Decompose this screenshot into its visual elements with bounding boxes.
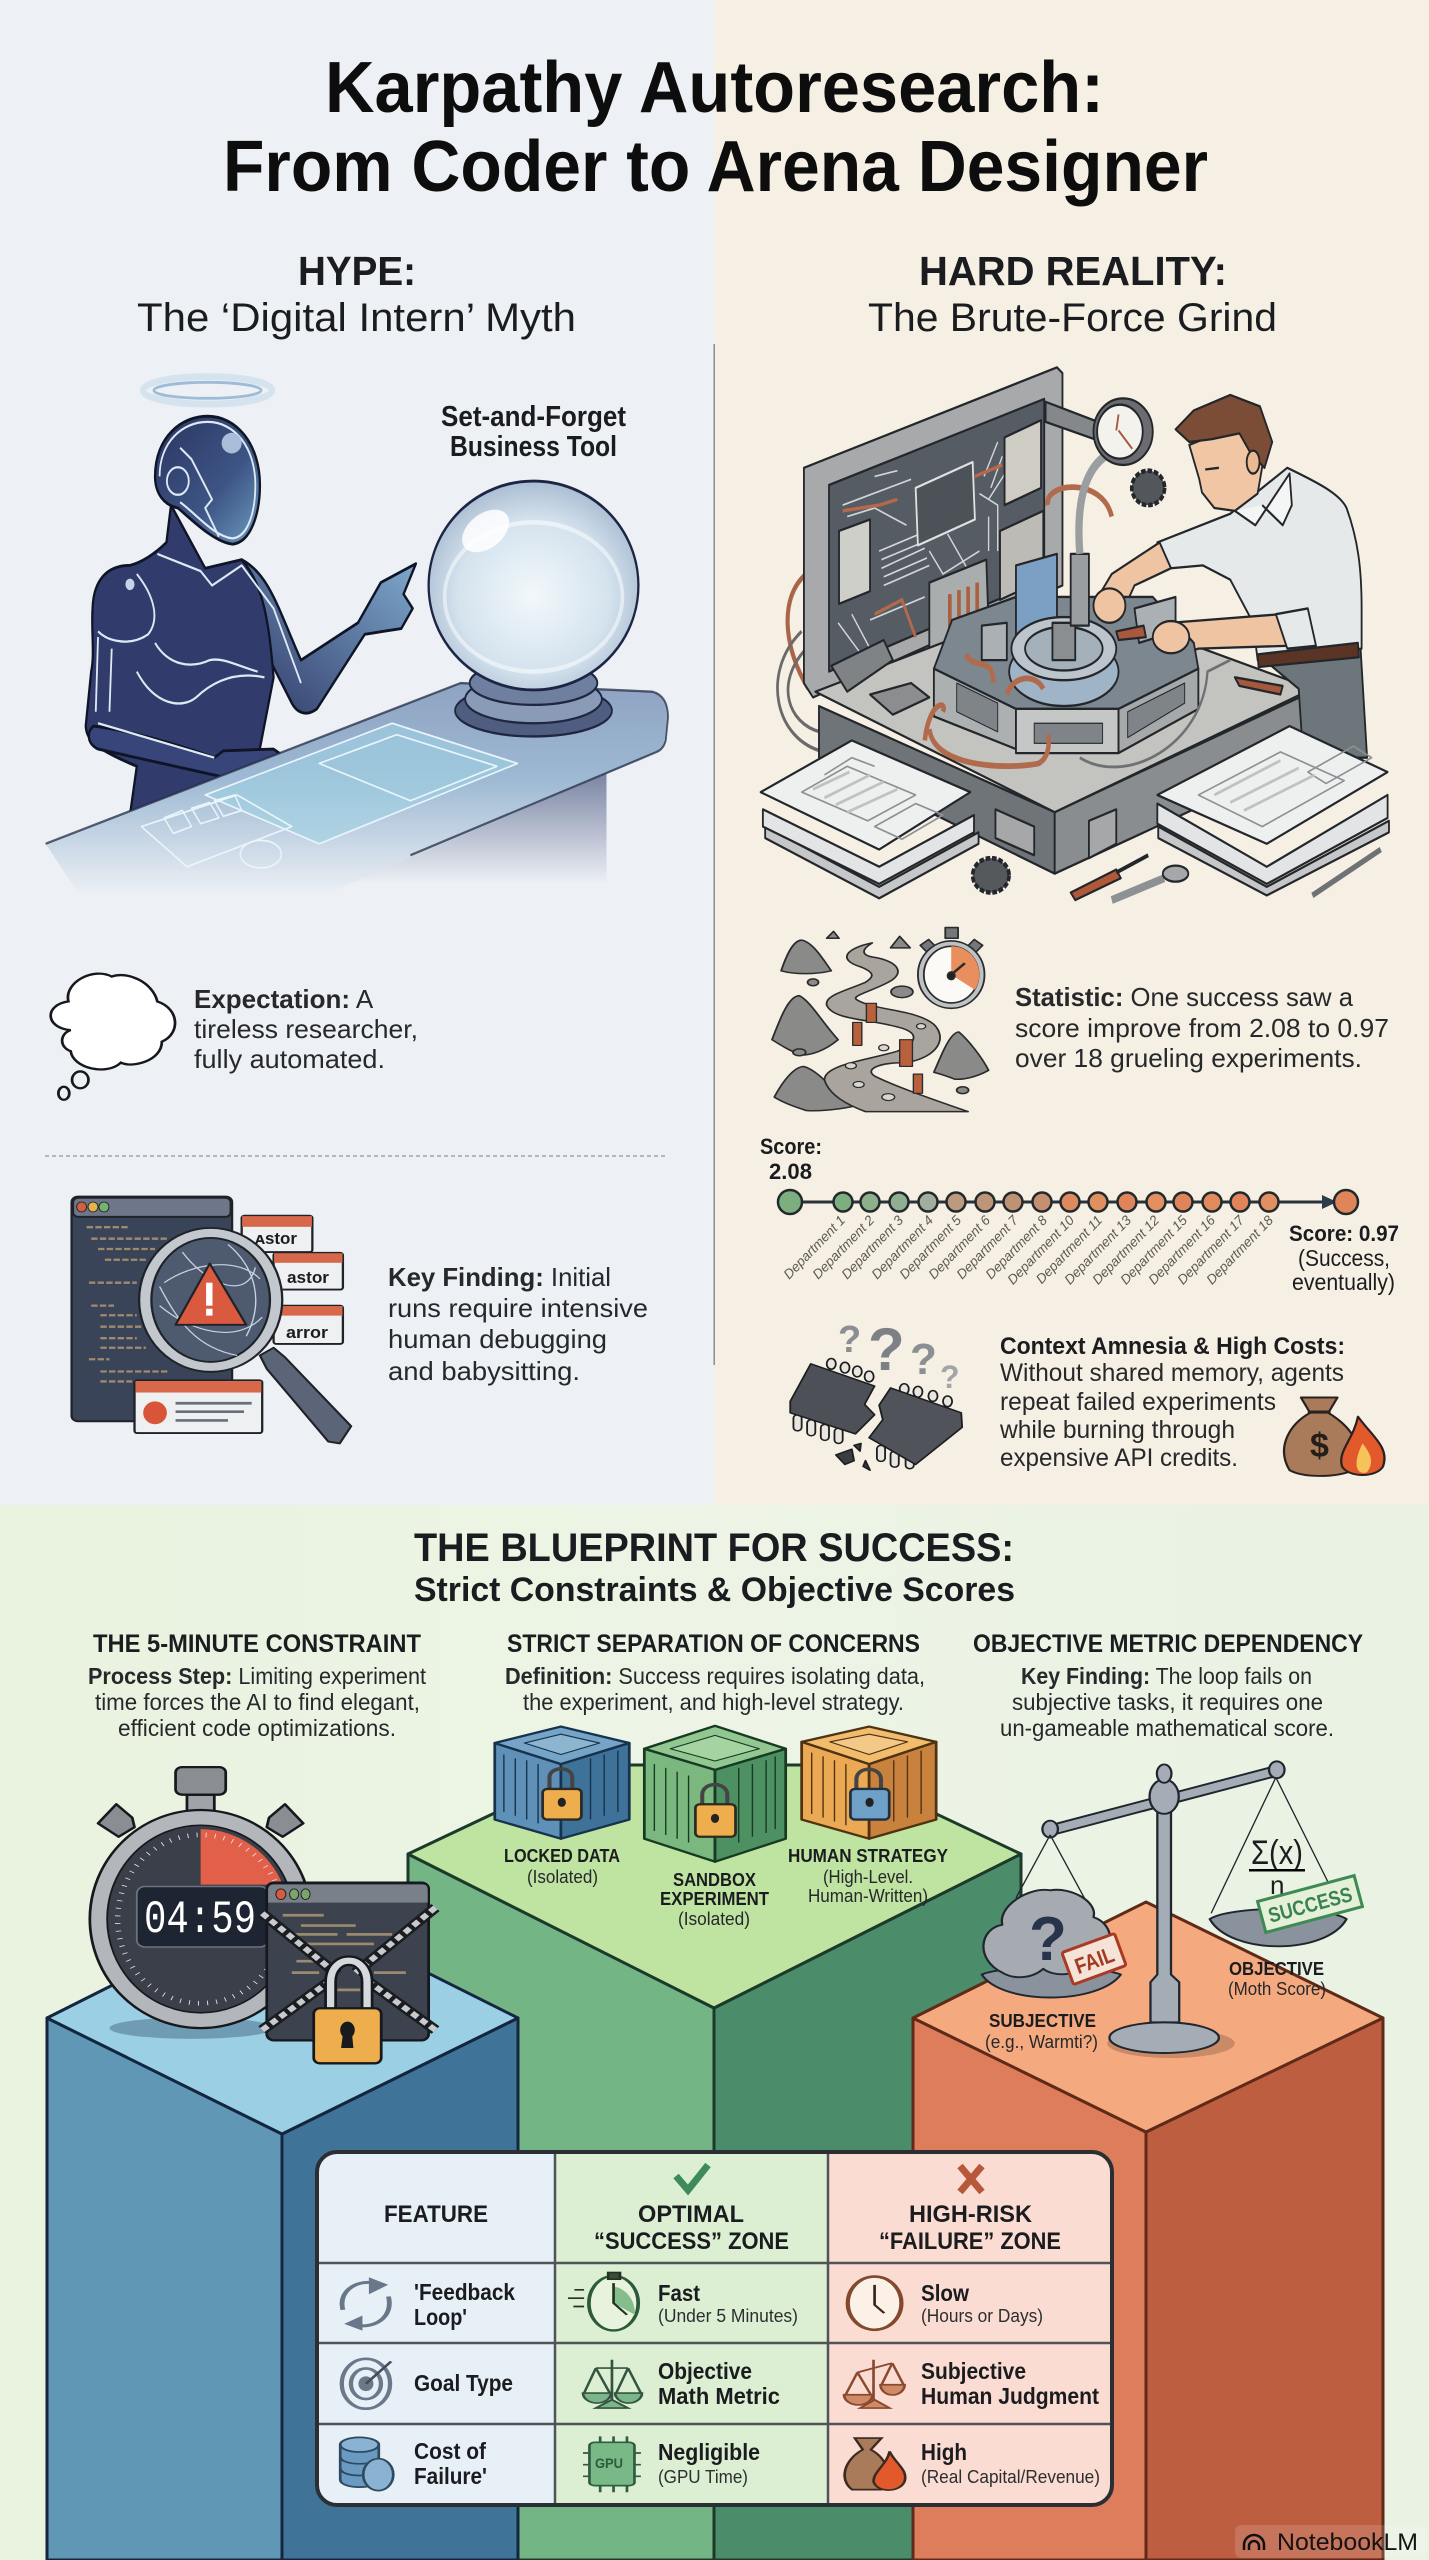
- stamp: fail: [1062, 1933, 1126, 1985]
- label: subjective: SUBJECTIVE: [989, 2011, 1096, 2031]
- column: objective metric: Key Finding: The loop fails on: [1021, 1663, 1312, 1689]
- experiment labels: Department 4: [869, 1213, 936, 1282]
- header: feature: FEATURE: [384, 2201, 488, 2228]
- icon: question marks: ?: [868, 1316, 905, 1383]
- right pan: [1210, 1909, 1347, 1946]
- error cards: [242, 1216, 343, 1344]
- rolled sleeve: [1276, 608, 1316, 649]
- icon: gpu chip: [583, 2436, 641, 2492]
- helmet gloss: [125, 433, 242, 590]
- desk top: [46, 683, 668, 913]
- icon: green scale: [583, 2360, 642, 2408]
- gpu label: GPU: [595, 2455, 623, 2471]
- column: objective metric: OBJECTIVE METRIC DEPENDENCY: [973, 1630, 1363, 1658]
- experiment labels: Department 16: [1145, 1212, 1218, 1287]
- column: separation of concerns: [505, 1630, 925, 1715]
- robot body: [86, 416, 310, 815]
- chip pins: [793, 1358, 952, 1469]
- title: Karpathy Autoresearch:: [325, 48, 1104, 128]
- error labels: arror: [286, 1323, 328, 1342]
- label: sandbox experiment: EXPERIMENT: [660, 1889, 769, 1909]
- stopwatch: [918, 928, 984, 1008]
- row 3 failure: (Real Capital/Revenue): [921, 2467, 1100, 2487]
- text: statistic: [1015, 982, 1389, 1073]
- illustration: engineer at circuit machine: [761, 367, 1389, 900]
- text: context amnesia: while burning through: [999, 1416, 1235, 1444]
- icon: database with dollar coin: [340, 2437, 393, 2491]
- row 2 feature: Goal Type: [414, 2370, 513, 2396]
- column: objective metric: [973, 1630, 1363, 1741]
- strings: [1016, 1777, 1328, 1913]
- text: statistic: over 18 grueling experiments.: [1015, 1043, 1362, 1073]
- desk front: [292, 763, 606, 913]
- pivots: [1042, 1761, 1285, 1838]
- label: subjective: [985, 2011, 1098, 2052]
- row 2 success: [658, 2358, 780, 2409]
- robot highlights: [96, 422, 301, 758]
- digital time readout: 04:59: [144, 1894, 256, 1946]
- ticks: [118, 1835, 284, 2003]
- icon: slow clock: [848, 2277, 901, 2330]
- row 2 failure: [921, 2358, 1099, 2409]
- text: context amnesia: [999, 1333, 1345, 1472]
- experiment labels: [781, 1212, 1276, 1287]
- end score: eventually): [1292, 1269, 1395, 1295]
- label: sandbox experiment: [660, 1870, 769, 1929]
- grey cloud: [983, 1890, 1110, 1977]
- start score: [760, 1134, 822, 1184]
- icon: burning money bag: [1284, 1398, 1385, 1476]
- error labels: ᴀstor: [255, 1229, 297, 1248]
- icon: halo: [143, 377, 272, 404]
- experiment labels: Department 8: [983, 1212, 1050, 1282]
- row 3 success: [658, 2439, 760, 2487]
- hands: [1093, 588, 1189, 653]
- table cell backgrounds: [317, 2152, 1112, 2505]
- row 3 success: (GPU Time): [658, 2467, 748, 2487]
- column: separation of concerns: the experiment, and high-level strategy.: [523, 1689, 904, 1715]
- table grid: [317, 2152, 1112, 2505]
- experiment labels: Department 3: [839, 1212, 906, 1282]
- icon: feedback loop: [342, 2278, 389, 2330]
- arrow: [1322, 1195, 1337, 1209]
- icon: crate sandbox: [644, 1726, 786, 1862]
- row 1 success: (Under 5 Minutes): [658, 2306, 798, 2326]
- row 3 failure: [921, 2439, 1100, 2487]
- magnifier lens: [139, 1228, 282, 1372]
- text: key finding hype: [388, 1262, 648, 1386]
- base shadow and base: [1107, 2029, 1235, 2058]
- illustration: robot and crystal ball: [46, 377, 668, 913]
- crystal ball: [429, 481, 638, 690]
- trousers: [1258, 643, 1367, 758]
- label: set-and-forget: Business Tool: [450, 431, 617, 463]
- pedestal: green: [408, 1765, 1021, 2560]
- label: human strategy: HUMAN STRATEGY: [788, 1846, 948, 1866]
- text: key finding hype: Key Finding: Initial: [388, 1262, 611, 1292]
- label: human strategy: Human-Written): [808, 1886, 928, 1906]
- robot right arm: [242, 560, 416, 713]
- header: success zone: “SUCCESS” ZONE: [594, 2228, 789, 2255]
- label: set-and-forget: Set-and-Forget: [441, 401, 626, 433]
- label: set-and-forget: [441, 401, 626, 463]
- column: 5-minute constraint: Process Step: Limiting experiment: [88, 1663, 427, 1689]
- pedestal: blue: [47, 1900, 518, 2560]
- icon: crate locked data: [495, 1727, 629, 1839]
- icon: stopwatch and locked code window: [90, 1767, 435, 2063]
- tools on floor: [973, 850, 1381, 900]
- end score: (Success,: [1298, 1245, 1390, 1271]
- stopwatch case: [90, 1810, 311, 2028]
- heading: hard reality: The Brute-Force Grind: [868, 296, 1277, 340]
- barriers: [853, 1003, 922, 1093]
- experiment labels: Department 18: [1203, 1212, 1276, 1287]
- row 1 success: [658, 2280, 798, 2326]
- icon: balance scale: [982, 1761, 1347, 2058]
- holographic screen on desk: [141, 723, 518, 868]
- start score: Score:: [760, 1134, 822, 1159]
- icon: money bag fire: [845, 2438, 905, 2490]
- watermark: NotebookLM: [1235, 2525, 1427, 2558]
- icon: broken chip: [790, 1358, 962, 1470]
- dollar sign: $: [1310, 1427, 1329, 1465]
- row 3 feature: Failure': [414, 2463, 487, 2489]
- panel: blueprint background: [0, 1505, 1429, 2560]
- hexagonal core: [934, 554, 1198, 753]
- grey pipes on platform: [1080, 660, 1230, 767]
- formula: n: [1270, 1870, 1284, 1900]
- padlock: [314, 1961, 381, 2063]
- text: context amnesia: Context Amnesia & High Costs:: [1000, 1333, 1345, 1360]
- timeline chart: 18 experiments: [760, 1134, 1399, 1295]
- pipes: [925, 487, 1112, 766]
- text: context amnesia: expensive API credits.: [1000, 1444, 1238, 1472]
- column: objective metric: un-gameable mathematical score.: [1000, 1715, 1334, 1741]
- icon: check mark: [676, 2165, 708, 2190]
- row 2 failure: Human Judgment: [921, 2383, 1099, 2409]
- experiment labels: Department 1: [781, 1213, 848, 1282]
- stamp: fail: FAIL: [1071, 1942, 1118, 1979]
- pedestal: orange: [913, 1902, 1383, 2560]
- icon: tilted scale: [844, 2360, 905, 2408]
- text: statistic: score improve from 2.08 to 0.97: [1015, 1013, 1389, 1043]
- column: objective metric: subjective tasks, it requires one: [1012, 1689, 1323, 1715]
- shirt: [1157, 468, 1362, 660]
- label: objective: [1228, 1959, 1326, 1999]
- magnifier handle: [260, 1348, 351, 1443]
- beam: [1050, 1766, 1278, 1835]
- comparison table: [317, 2152, 1112, 2505]
- column: 5-minute constraint: time forces the AI to find elegant,: [95, 1689, 420, 1715]
- monitor: [804, 367, 1062, 697]
- icon: target: [342, 2359, 391, 2409]
- icon: fast stopwatch: [568, 2273, 638, 2330]
- column: 5-minute constraint: [88, 1630, 427, 1741]
- stopwatch face: [107, 1825, 294, 2013]
- label: objective: (Moth Score): [1228, 1979, 1326, 1999]
- heading: hype: [137, 248, 576, 340]
- lower arm: [1155, 614, 1290, 657]
- title: [223, 48, 1208, 207]
- head: [1176, 395, 1272, 511]
- label: subjective: (e.g., Warmti?): [985, 2032, 1098, 2052]
- experiment labels: Department 7: [954, 1212, 1021, 1282]
- label: human strategy: [788, 1846, 948, 1906]
- column: separation of concerns: Definition: Success requires isolating data,: [505, 1663, 925, 1689]
- icon: question marks: ?: [910, 1335, 937, 1384]
- pole: [1150, 1802, 1179, 2022]
- error labels: [255, 1229, 329, 1342]
- label: sandbox experiment: (Isolated): [678, 1909, 750, 1929]
- foot: [1109, 2022, 1219, 2053]
- chains: [262, 1908, 435, 2030]
- text: expectation: [194, 984, 418, 1074]
- icon: question marks: [838, 1316, 960, 1395]
- experiment labels: Department 5: [897, 1212, 964, 1282]
- row 1 failure: Slow: [921, 2280, 969, 2306]
- icon: debugging window with magnifier: [72, 1197, 351, 1443]
- cables: [788, 574, 808, 689]
- alert card: [135, 1380, 262, 1433]
- right chip half: [869, 1388, 962, 1464]
- left chip half: [790, 1364, 875, 1434]
- row 3 failure: High: [921, 2439, 967, 2465]
- icon: crate human strategy: [802, 1727, 936, 1839]
- formula: Σ(x): [1251, 1834, 1303, 1872]
- label: objective: OBJECTIVE: [1229, 1959, 1324, 1979]
- icon: question marks: ?: [940, 1359, 960, 1395]
- heading: hard reality: [868, 248, 1277, 340]
- experiment labels: Department 13: [1061, 1212, 1134, 1287]
- start score: 2.08: [769, 1159, 812, 1184]
- belt: [1258, 643, 1359, 667]
- tools on platform: [831, 640, 1283, 715]
- experiment labels: Department 12: [1089, 1212, 1162, 1287]
- row 1 failure: (Hours or Days): [921, 2306, 1043, 2326]
- text: key finding hype: and babysitting.: [388, 1356, 580, 1386]
- text: expectation: tireless researcher,: [194, 1014, 418, 1044]
- title: From Coder to Arena Designer: [223, 127, 1208, 207]
- panel: hard reality background: [714, 0, 1429, 1505]
- end score: Score: 0.97: [1289, 1221, 1399, 1246]
- column: separation of concerns: STRICT SEPARATION OF CONCERNS: [507, 1630, 920, 1658]
- heading: blueprint: [414, 1526, 1015, 1609]
- experiment labels: Department 2: [810, 1212, 877, 1282]
- panel: hype background: [0, 0, 714, 1505]
- left pan: [982, 1967, 1121, 1998]
- icon: cross mark: [960, 2166, 982, 2192]
- header: success zone: OPTIMAL: [638, 2201, 744, 2228]
- row 3 feature: Cost of: [414, 2438, 486, 2464]
- header: failure zone: “FAILURE” ZONE: [879, 2228, 1061, 2255]
- text: expectation: fully automated.: [194, 1044, 385, 1074]
- road pebbles: [845, 1024, 926, 1101]
- text: statistic: Statistic: One success saw a: [1015, 982, 1354, 1012]
- icon: question marks: ?: [838, 1319, 861, 1361]
- text: key finding hype: human debugging: [388, 1324, 607, 1354]
- row 2 failure: Subjective: [921, 2358, 1026, 2384]
- column: 5-minute constraint: THE 5-MINUTE CONSTRAINT: [93, 1630, 421, 1658]
- right paper stack: [1157, 726, 1389, 895]
- machine base: [815, 597, 1312, 874]
- row 1 success: Fast: [658, 2280, 700, 2306]
- column: 5-minute constraint: efficient code optimizations.: [118, 1715, 396, 1741]
- row 1 feature: 'Feedback: [414, 2279, 515, 2305]
- header: success zone: [594, 2201, 789, 2255]
- text: context amnesia: repeat failed experiments: [1000, 1388, 1276, 1416]
- cloud question mark: ?: [1029, 1905, 1067, 1974]
- row 3 feature: [414, 2438, 487, 2489]
- left paper stack: [761, 740, 979, 898]
- experiment labels: Department 15: [1117, 1212, 1190, 1287]
- road: [824, 943, 968, 1112]
- row 2 success: Math Metric: [658, 2383, 780, 2409]
- text: context amnesia: Without shared memory, agents: [1000, 1359, 1344, 1387]
- icon: winding road with stopwatch: [772, 928, 989, 1112]
- orb base: [455, 661, 612, 736]
- rocks: [772, 931, 989, 1111]
- gauge: [1046, 398, 1153, 554]
- desk edge: [46, 683, 668, 855]
- watermark: NotebookLM: NotebookLM: [1277, 2529, 1418, 2556]
- row 1 feature: [414, 2279, 515, 2330]
- shadow: [109, 2017, 274, 2039]
- gear: [1132, 471, 1165, 505]
- row 1 feature: Loop': [414, 2304, 467, 2330]
- code window: [267, 1883, 429, 2040]
- label: sandbox experiment: SANDBOX: [673, 1870, 756, 1890]
- label: locked data: LOCKED DATA: [504, 1846, 620, 1866]
- chip debris: [836, 1443, 870, 1470]
- formula: [1249, 1834, 1305, 1900]
- forearm: [1098, 542, 1171, 626]
- icon: thought cloud: [51, 974, 175, 1100]
- experiment labels: Department 10: [1004, 1212, 1077, 1287]
- row 3 success: Negligible: [658, 2439, 760, 2465]
- end score: [1289, 1221, 1399, 1295]
- collar: [1235, 474, 1292, 525]
- label: locked data: [504, 1846, 620, 1887]
- heading: blueprint: Strict Constraints & Objective Scores: [414, 1571, 1015, 1609]
- heading: hard reality: HARD REALITY:: [919, 248, 1227, 294]
- cables grey: [777, 631, 824, 752]
- digital display: [137, 1887, 268, 1947]
- code window: [72, 1197, 232, 1421]
- experiment labels: Department 11: [1033, 1213, 1105, 1287]
- text: key finding hype: runs require intensive: [388, 1293, 648, 1323]
- heading: hype: The ‘Digital Intern’ Myth: [137, 296, 576, 340]
- red wedge: [201, 1829, 283, 1885]
- heading: hype: HYPE:: [298, 248, 416, 294]
- label: locked data: (Isolated): [527, 1867, 598, 1887]
- text: expectation: Expectation: A: [194, 984, 374, 1014]
- crown: [98, 1767, 303, 1837]
- stamp: success: SUCCESS: [1266, 1883, 1355, 1928]
- heading: blueprint: THE BLUEPRINT FOR SUCCESS:: [414, 1526, 1014, 1570]
- row 1 failure: [921, 2280, 1043, 2326]
- nodes: [778, 1190, 1358, 1214]
- experiment labels: Department 6: [926, 1212, 993, 1282]
- label: human strategy: (High-Level.: [823, 1867, 913, 1887]
- error labels: astor: [287, 1268, 329, 1287]
- row 2 success: Objective: [658, 2358, 752, 2384]
- experiment labels: Department 17: [1174, 1212, 1247, 1287]
- header: failure zone: [879, 2201, 1061, 2255]
- header: failure zone: HIGH-RISK: [909, 2201, 1033, 2228]
